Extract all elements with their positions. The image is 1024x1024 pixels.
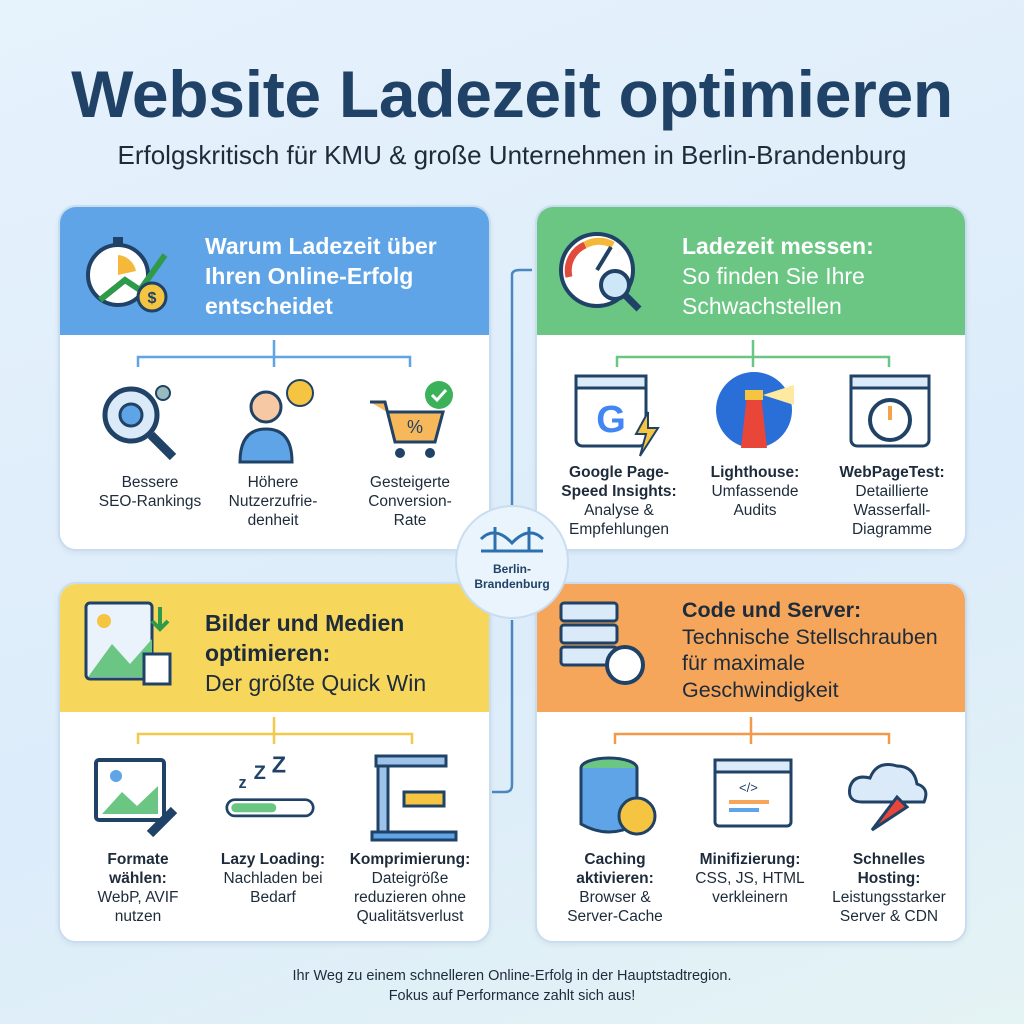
panel: ladezeit messen: Detaillierte bbox=[855, 483, 929, 500]
panel: warum ladezeit: denheit bbox=[248, 512, 298, 529]
panel: bilder und medien: Qualitätsverlust bbox=[357, 908, 463, 925]
icon: database bbox=[580, 756, 656, 836]
icon: webpagetest bbox=[850, 374, 930, 448]
subtitle: Erfolgskritisch für KMU & große Unternehmen in Berlin-Brandenburg bbox=[117, 140, 906, 170]
footer: Ihr Weg zu einem schnelleren Online-Erfolg in der Hauptstadtregion. bbox=[292, 968, 732, 984]
icon: google: G bbox=[596, 399, 626, 441]
item texts bbox=[567, 851, 663, 925]
item texts: Caching bbox=[584, 851, 646, 868]
panel: ladezeit messen bbox=[535, 205, 967, 551]
header text: Code und Server: bbox=[682, 598, 861, 622]
center badge: berlin-brandenburg: Berlin- bbox=[493, 562, 531, 576]
header text bbox=[205, 610, 426, 696]
title: Website Ladezeit optimieren bbox=[71, 57, 953, 131]
center badge: berlin-brandenburg: Brandenburg bbox=[474, 577, 550, 591]
header text: So finden Sie Ihre bbox=[682, 263, 865, 289]
item texts: Server-Cache bbox=[567, 908, 663, 925]
header text: Der größte Quick Win bbox=[205, 670, 426, 696]
item texts: Bessere bbox=[122, 474, 178, 491]
icon: cart bbox=[370, 381, 453, 458]
item texts: aktivieren: bbox=[576, 870, 654, 887]
panel: code und server: verkleinern bbox=[712, 889, 788, 906]
icon: server gear bbox=[560, 602, 645, 685]
panel: bilder und medien: Bedarf bbox=[250, 889, 296, 906]
header text bbox=[682, 598, 938, 702]
panel: ladezeit messen: Umfassende bbox=[711, 483, 798, 500]
item texts bbox=[99, 474, 201, 510]
header text: Geschwindigkeit bbox=[682, 678, 839, 702]
panel: warum ladezeit: Nutzerzufrie- bbox=[229, 493, 317, 510]
item texts: nutzen bbox=[115, 908, 161, 925]
panel: warum ladezeit: Conversion- bbox=[368, 493, 452, 510]
panel: bilder und medien: Komprimierung: bbox=[350, 851, 470, 868]
panel: code und server bbox=[535, 582, 967, 943]
header text bbox=[682, 233, 874, 319]
header text: Ladezeit messen: bbox=[682, 233, 874, 259]
icon: lazy loading: z bbox=[239, 774, 247, 792]
header yellow bbox=[60, 584, 489, 712]
icon: rocket cloud bbox=[848, 763, 928, 832]
panel: code und server: Minifizierung: bbox=[700, 851, 800, 868]
panel: warum ladezeit bbox=[58, 205, 491, 551]
icon: cart: % bbox=[407, 417, 423, 437]
item texts: Google Page- bbox=[569, 464, 669, 481]
header text: für maximale bbox=[682, 651, 805, 675]
header green bbox=[537, 207, 965, 335]
icon: stopwatch bbox=[86, 237, 168, 312]
panel: code und server: Leistungsstarker bbox=[832, 889, 946, 906]
panel: ladezeit messen: Audits bbox=[733, 502, 777, 519]
icon: press bbox=[370, 754, 458, 842]
panel: code und server: CSS, JS, HTML bbox=[695, 870, 805, 887]
header text: Bilder und Medien bbox=[205, 610, 404, 636]
panel: ladezeit messen: Lighthouse: bbox=[711, 464, 799, 481]
header text: entscheidet bbox=[205, 293, 333, 319]
panel: warum ladezeit: Höhere bbox=[248, 474, 298, 491]
header text: Schwachstellen bbox=[682, 293, 842, 319]
item texts: Speed Insights: bbox=[561, 483, 677, 500]
panel: code und server: Schnelles bbox=[853, 851, 925, 868]
icon: lazy loading: Z bbox=[254, 762, 266, 784]
panel: code und server: Server & CDN bbox=[840, 908, 938, 925]
icon: google bbox=[574, 374, 660, 456]
icon: stopwatch: $ bbox=[148, 290, 157, 307]
icon: lazy loading bbox=[225, 752, 315, 818]
center badge: berlin-brandenburg bbox=[455, 505, 569, 619]
icon: images bbox=[84, 602, 172, 686]
header text bbox=[205, 233, 437, 319]
item texts: wählen: bbox=[109, 870, 167, 887]
panel: code und server: Hosting: bbox=[858, 870, 920, 887]
panel: bilder und medien bbox=[58, 582, 491, 943]
panel: bilder und medien: Nachladen bei bbox=[223, 870, 323, 887]
panel: ladezeit messen: Wasserfall- bbox=[854, 502, 930, 519]
icon: gauge bbox=[559, 232, 642, 312]
header text: Technische Stellschrauben bbox=[682, 624, 938, 648]
header blue bbox=[60, 207, 489, 335]
item texts: Analyse & bbox=[584, 502, 654, 519]
panel: bilder und medien: Dateigröße bbox=[372, 870, 448, 887]
item texts: WebP, AVIF bbox=[98, 889, 178, 906]
icon: seo bbox=[102, 385, 176, 460]
header text: Warum Ladezeit über bbox=[205, 233, 437, 259]
icon: code window: </> bbox=[739, 780, 758, 795]
header text: optimieren: bbox=[205, 640, 330, 666]
item texts: Empfehlungen bbox=[569, 521, 669, 538]
panel: ladezeit messen: Diagramme bbox=[852, 521, 932, 538]
panel: bilder und medien: Lazy Loading: bbox=[221, 851, 325, 868]
icon: lighthouse bbox=[716, 372, 794, 448]
header orange bbox=[537, 584, 965, 712]
panel: warum ladezeit: Rate bbox=[394, 512, 426, 529]
footer: Fokus auf Performance zahlt sich aus! bbox=[389, 988, 635, 1004]
panel: bilder und medien: reduzieren ohne bbox=[354, 889, 466, 906]
icon: user bbox=[238, 379, 314, 464]
item texts: SEO-Rankings bbox=[99, 493, 201, 510]
footer bbox=[292, 968, 732, 1004]
icon: image tool bbox=[94, 758, 178, 838]
panel: warum ladezeit: Gesteigerte bbox=[370, 474, 450, 491]
icon: code window bbox=[714, 758, 792, 828]
icon: lazy loading: Z bbox=[272, 752, 286, 778]
item texts: Formate bbox=[107, 851, 169, 868]
icon: bridge bbox=[480, 527, 544, 552]
item texts: Browser & bbox=[579, 889, 651, 906]
panel: ladezeit messen: WebPageTest: bbox=[839, 464, 945, 481]
header text: Ihren Online-Erfolg bbox=[205, 263, 413, 289]
item texts bbox=[561, 464, 677, 538]
item texts bbox=[98, 851, 178, 925]
